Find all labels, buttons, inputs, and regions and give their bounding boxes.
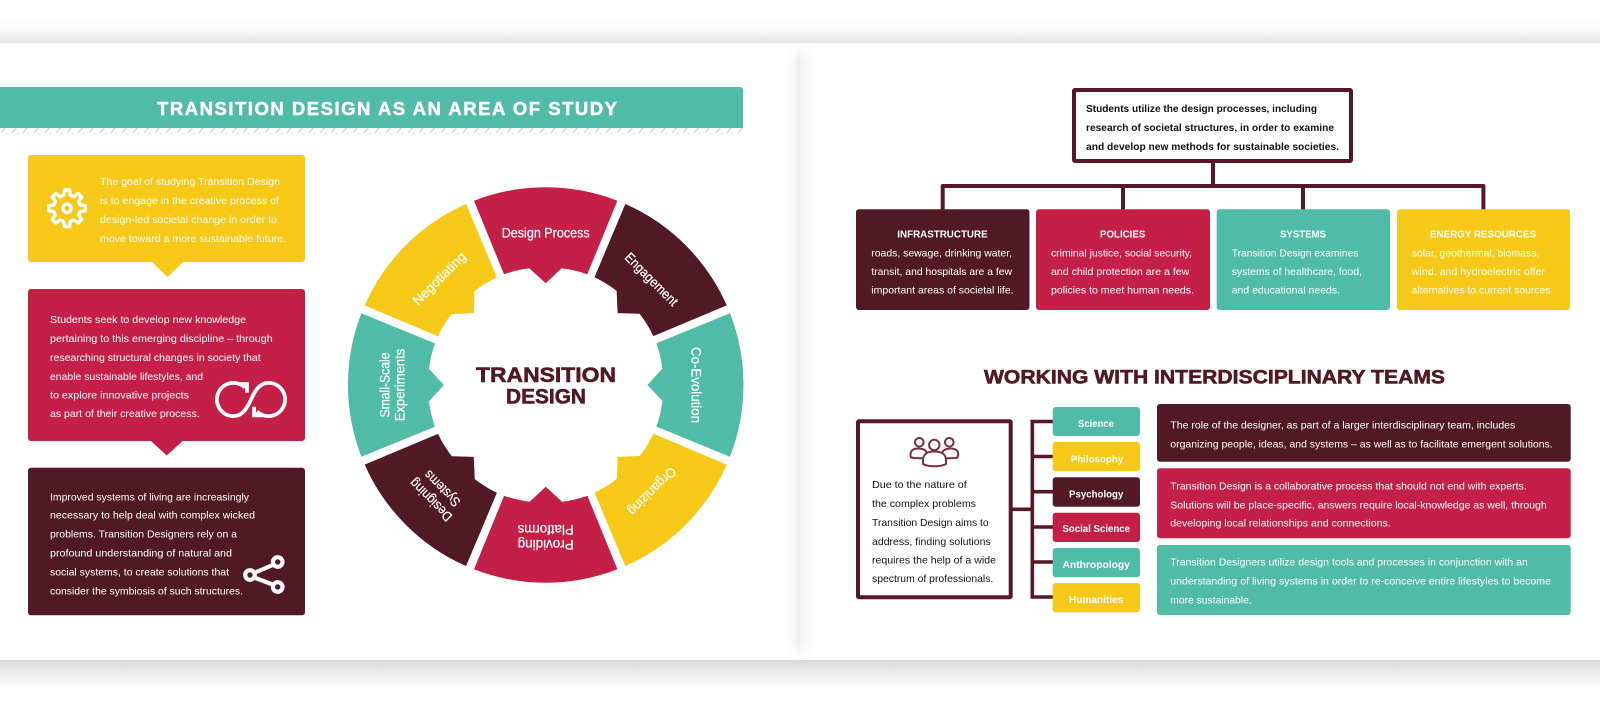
segment: Small-Scale Experiments: Experiments: [393, 348, 408, 421]
text: complex problems: [872, 479, 996, 585]
segment: Designing Systems: Designing: [406, 476, 455, 524]
chip: Anthropology: Anthropology: [1063, 559, 1130, 571]
card: energy resources: [1397, 209, 1570, 310]
segment: Providing Platforms: Providing: [518, 537, 574, 552]
card: energy resources: alternatives to current sources.: [1412, 284, 1553, 296]
card: policies: [1036, 209, 1210, 310]
panel: design tools and living systems: more sustainable.: [1170, 594, 1252, 606]
header banner: Transition Design as an area of study: TRANSITION DESIGN AS AN AREA OF STUDY: [157, 98, 618, 119]
segment: Designing Systems: Systems: [421, 467, 463, 510]
panel: collaborative process: Solutions will be place-specific, answers require local-knowledge as well, through: [1170, 499, 1547, 511]
chip: Science: Science: [1078, 418, 1114, 430]
text: complex problems: address, finding solutions: [872, 536, 991, 548]
segment: Co-Evolution: Co-Evolution: [689, 347, 704, 423]
icon: share nodes: [245, 557, 283, 592]
chip: Humanities: [1053, 583, 1140, 612]
card: systems: SYSTEMS: [1280, 228, 1326, 240]
segment: Engagement: Engagement: [622, 250, 681, 309]
card: infrastructure: transit, and hospitals are a few: [871, 266, 1012, 278]
card: policies: POLICIES: [1100, 228, 1145, 240]
text box: design processes statement: research of societal structures, in order to examine: [1086, 122, 1334, 134]
segment: Co-Evolution: [647, 313, 743, 457]
card: infrastructure: important areas of societal life.: [871, 284, 1014, 296]
segment: Negotiating: Negotiating: [410, 249, 469, 308]
chip: Humanities: Humanities: [1069, 594, 1123, 606]
text: goal: is to engage in the creative process of: [100, 195, 279, 207]
panel: collaborative process: Transition Design is a collaborative process that should not end with experts.: [1170, 480, 1527, 492]
icon: people: [910, 438, 958, 466]
icon: gear: [49, 190, 85, 227]
card: systems: Transition Design examines: [1232, 248, 1358, 260]
card: policies: policies to meet human needs.: [1051, 284, 1194, 296]
panel: design tools and living systems: understanding of living systems in order to re-conceive entire lifestyles to become: [1170, 575, 1551, 587]
text: improved systems: problems. Transition Designers rely on a: [50, 528, 237, 540]
segment: Engagement: [567, 194, 736, 364]
text: complex problems: Transition Design aims to: [872, 517, 989, 529]
card: energy resources: ENERGY RESOURCES: [1430, 228, 1536, 240]
text: improved systems: necessary to help deal with complex wicked: [50, 509, 255, 521]
card: policies: criminal justice, social security,: [1051, 248, 1192, 260]
chip: Philosophy: [1053, 442, 1140, 471]
text: goal: [100, 176, 286, 245]
panel: collaborative process: [1157, 468, 1571, 538]
chart: transition design wheel: [348, 187, 743, 583]
card: infrastructure: [856, 209, 1030, 310]
connector: box to disciplines: [1012, 422, 1054, 597]
text: new knowledge: [50, 314, 273, 420]
panel: improved systems of living (dark): [28, 468, 305, 615]
segment: Providing Platforms: [474, 487, 617, 583]
chip: Social Science: [1053, 513, 1140, 542]
panel: role of the designer: organizing people, ideas, and systems – as well as to facilitate emergent solutions.: [1170, 438, 1553, 450]
panel: design tools and living systems: [1157, 545, 1571, 615]
text: improved systems: profound understanding of natural and: [50, 547, 232, 559]
text: new knowledge: as part of their creative process.: [50, 408, 200, 420]
chip: Social Science: Social Science: [1062, 523, 1130, 535]
text: new knowledge: enable sustainable lifestyles, and: [50, 371, 203, 383]
chip: Psychology: [1053, 477, 1140, 507]
text: goal: design-led societal change in order to: [100, 214, 277, 226]
chip: Anthropology: [1053, 548, 1140, 577]
card: infrastructure: INFRASTRUCTURE: [897, 228, 988, 240]
panel: new knowledge (crimson callout): [28, 289, 305, 456]
text box: design processes statement: [1074, 90, 1351, 161]
header banner: Transition Design as an area of study: [0, 87, 743, 134]
text: improved systems: social systems, to create solutions that: [50, 566, 229, 578]
card: infrastructure: roads, sewage, drinking water,: [871, 248, 1012, 260]
text: new knowledge: pertaining to this emerging discipline – through: [50, 333, 273, 345]
text box: design processes statement: and develop new methods for sustainable societies.: [1086, 141, 1339, 153]
segment: Small-Scale Experiments: [348, 313, 444, 457]
wheel centre title: TRANSITION: [476, 364, 616, 387]
segment: Design Process: Design Process: [502, 226, 590, 240]
segment: Small-Scale Experiments: Small-Scale: [378, 352, 393, 418]
segment: Negotiating: [355, 194, 524, 364]
panel: goal of studying (yellow callout): [28, 155, 305, 277]
card: systems: systems of healthcare, food,: [1232, 266, 1362, 278]
panel: design tools and living systems: Transition Designers utilize design tools and processes in conjunction with an: [1170, 556, 1528, 568]
panel: role of the designer: The role of the designer, as part of a larger interdisciplinary team, includes: [1170, 420, 1515, 432]
text: complex problems: spectrum of professionals.: [872, 573, 993, 585]
text: complex problems: Due to the nature of: [872, 479, 967, 491]
panel: role of the designer: [1157, 404, 1571, 462]
panel: collaborative process: developing local relationships and connections.: [1170, 518, 1391, 530]
segment: Design Process: [474, 187, 617, 283]
wheel centre title: [476, 364, 616, 408]
card: systems: and educational needs.: [1232, 284, 1340, 296]
segment: Organizing: [567, 406, 736, 576]
chip: Psychology: Psychology: [1069, 488, 1123, 500]
text: goal: The goal of studying Transition Design: [100, 176, 280, 188]
text: complex problems: the complex problems: [872, 498, 976, 510]
text: new knowledge: to explore innovative projects: [50, 390, 189, 402]
card: policies: and child protection are a few: [1051, 266, 1190, 278]
card: energy resources: wind, and hydroelectric offer: [1411, 266, 1545, 278]
segment: Designing Systems: [355, 406, 524, 576]
text: complex problems: requires the help of a wide: [872, 555, 996, 567]
card: energy resources: solar, geothermal, biomass,: [1412, 248, 1539, 260]
text: goal: move toward a more sustainable future.: [100, 233, 286, 245]
text: improved systems: Improved systems of living are increasingly: [50, 491, 250, 503]
heading: working with interdisciplinary teams: WORKING WITH INTERDISCIPLINARY TEAMS: [984, 366, 1445, 388]
chip: Science: [1053, 407, 1140, 436]
icon: infinity arrows: [217, 383, 285, 416]
chip: Philosophy: Philosophy: [1071, 453, 1123, 465]
segment: Organizing: Organizing: [625, 464, 679, 519]
segment: Providing Platforms: Platforms: [517, 522, 574, 537]
card: systems: [1217, 209, 1390, 310]
text: improved systems: [50, 491, 255, 597]
wheel centre title: DESIGN: [506, 386, 586, 408]
text: new knowledge: researching structural changes in society that: [50, 352, 261, 364]
text: improved systems: consider the symbiosis of such structures.: [50, 585, 243, 597]
tree connector: statement to four cards: [943, 163, 1483, 210]
text box: design processes statement: Students utilize the design processes, including: [1086, 103, 1317, 115]
text box: complex problems with people icon: [858, 421, 1011, 597]
text: new knowledge: Students seek to develop new knowledge: [50, 314, 246, 326]
